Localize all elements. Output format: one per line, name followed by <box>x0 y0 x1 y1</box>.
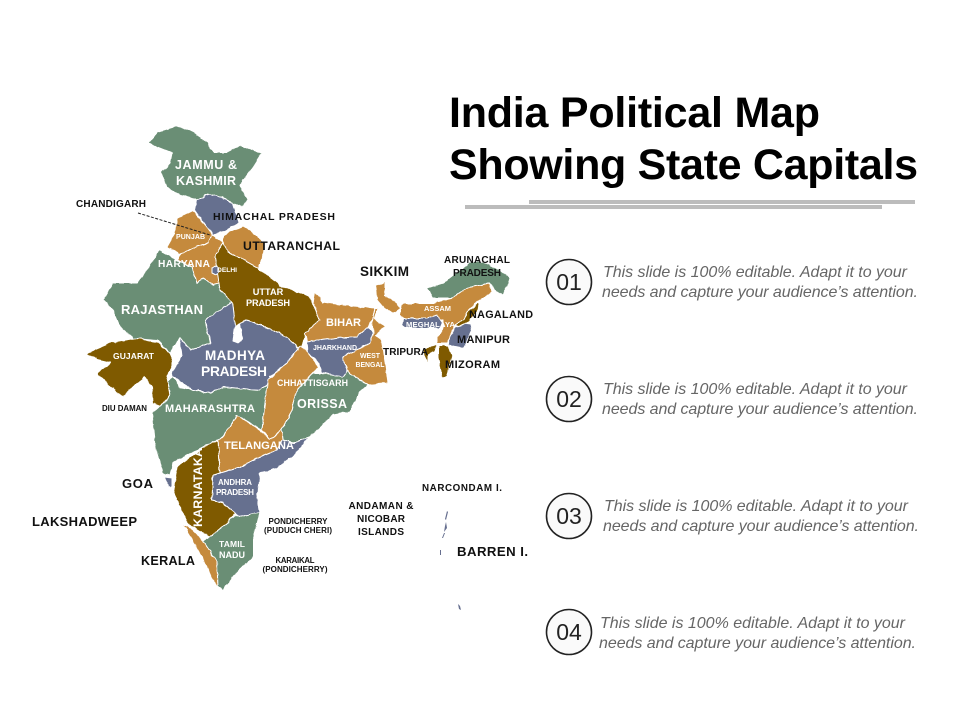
map labels: (PUDUCH CHERI) <box>264 526 332 535</box>
state: Orissa <box>282 370 368 443</box>
map labels: HARYANA <box>158 259 211 270</box>
map labels: CHHATTISGARH <box>277 378 348 388</box>
title <box>449 89 918 189</box>
map labels: PRADESH <box>246 298 290 308</box>
state: Arunachal Pradesh <box>427 262 510 298</box>
item 04: This slide is 100% editable. Adapt it to your <box>600 615 906 632</box>
item 01 <box>546 260 918 304</box>
Chandigarh leader line <box>138 213 210 235</box>
map labels: MAHARASHTRA <box>165 403 255 415</box>
item 01: This slide is 100% editable. Adapt it to your <box>603 264 908 281</box>
state: Meghalaya <box>402 315 443 328</box>
map labels: NARCONDAM I. <box>422 483 502 494</box>
title: India Political Map <box>449 89 820 137</box>
map labels: BENGAL <box>356 362 384 369</box>
map labels: ARUNACHAL <box>444 255 510 266</box>
map labels: LAKSHADWEEP <box>32 514 137 529</box>
map labels: ORISSA <box>297 397 347 411</box>
map labels <box>32 158 533 574</box>
state: Telangana <box>218 415 283 473</box>
item 04 <box>546 610 916 654</box>
item 03: 03 <box>556 503 582 529</box>
state: Uttar Pradesh <box>215 242 320 350</box>
state: Jammu and Kashmir <box>148 126 262 207</box>
map labels: JAMMU & <box>175 158 237 172</box>
item 03: needs and capture your audience’s attention. <box>603 518 919 535</box>
item 03: This slide is 100% editable. Adapt it to your <box>604 498 909 515</box>
map labels: KARNATAKA <box>191 448 205 527</box>
map labels: BARREN I. <box>457 544 528 559</box>
map labels: PRADESH <box>453 268 501 279</box>
map labels: UTTAR <box>253 287 284 297</box>
map labels: (PONDICHERRY) <box>262 565 328 574</box>
state: Haryana <box>177 235 223 285</box>
state: Manipur <box>448 323 472 348</box>
map labels: DELHI <box>217 267 237 274</box>
map labels: KARAIKAL <box>276 556 315 565</box>
item 04: needs and capture your audience’s attention. <box>599 635 916 652</box>
state: Chhattisgarh <box>262 347 318 440</box>
map labels: WEST <box>360 353 381 360</box>
map labels: DIU DAMAN <box>102 404 147 413</box>
map labels: PONDICHERRY <box>268 517 328 526</box>
state: Nagaland <box>455 302 480 327</box>
item 02: 02 <box>556 386 582 412</box>
map labels: NICOBAR <box>357 514 406 525</box>
map labels: TAMIL <box>219 539 245 549</box>
item 01: needs and capture your audience’s attention. <box>602 284 918 301</box>
state: Goa <box>165 477 172 488</box>
state: Andhra Pradesh <box>212 437 310 517</box>
Andaman and Nicobar islands <box>440 511 461 610</box>
map labels: KERALA <box>141 554 195 568</box>
state: Bihar <box>305 292 375 342</box>
map labels: GUJARAT <box>113 351 155 361</box>
map labels: ANDHRA <box>218 478 252 487</box>
map labels: RAJASTHAN <box>121 302 203 317</box>
map labels: TRIPURA <box>383 347 428 358</box>
map labels: MEGHALAYA <box>406 320 456 329</box>
map labels: MANIPUR <box>457 334 510 346</box>
map labels: SIKKIM <box>360 264 409 279</box>
map labels: ANDAMAN & <box>348 501 414 512</box>
map labels: NADU <box>219 550 245 560</box>
map labels: ASSAM <box>424 304 451 313</box>
map labels: KASHMIR <box>176 174 236 188</box>
state: Gujarat <box>87 338 173 407</box>
map labels: CHANDIGARH <box>76 199 146 210</box>
item 02: needs and capture your audience’s attention. <box>602 401 918 418</box>
state: Delhi <box>212 266 219 275</box>
item 03 <box>546 494 919 538</box>
item 02 <box>546 376 918 422</box>
map of India <box>87 126 510 590</box>
state: Tamil Nadu <box>203 512 260 590</box>
map labels: UTTARANCHAL <box>243 239 341 253</box>
map labels: JHARKHAND <box>313 345 357 352</box>
item 01: 01 <box>556 269 582 295</box>
state: West Bengal <box>343 308 388 385</box>
map labels: GOA <box>122 476 154 491</box>
state: Mizoram <box>438 345 452 378</box>
state: Maharashtra <box>152 377 270 475</box>
state: Rajasthan <box>103 250 232 353</box>
state: Sikkim area <box>376 282 400 313</box>
title: Showing State Capitals <box>449 141 918 189</box>
item 04: 04 <box>556 619 582 645</box>
map labels: BIHAR <box>326 317 361 329</box>
map labels: MIZORAM <box>445 359 500 371</box>
state: Kerala <box>183 523 218 587</box>
map labels: HIMACHAL PRADESH <box>213 211 335 223</box>
map labels: MADHYA <box>205 348 265 363</box>
state: Himachal Pradesh <box>195 194 239 235</box>
state: Punjab <box>167 210 212 255</box>
state: Assam <box>400 283 492 343</box>
map labels: PRADESH <box>201 364 267 379</box>
map labels: PRADESH <box>216 488 254 497</box>
state: Uttaranchal <box>223 226 265 268</box>
state: Madhya Pradesh <box>172 302 300 393</box>
state: Tripura <box>422 343 437 363</box>
state: Karnataka <box>173 440 235 537</box>
state: Jharkhand <box>307 328 373 377</box>
map labels: ISLANDS <box>358 527 404 538</box>
map labels: TELANGANA <box>224 440 294 452</box>
item 02: This slide is 100% editable. Adapt it to your <box>603 381 908 398</box>
map labels: NAGALAND <box>469 309 533 321</box>
map labels: PUNJAB <box>176 234 205 241</box>
title underline <box>465 200 915 209</box>
